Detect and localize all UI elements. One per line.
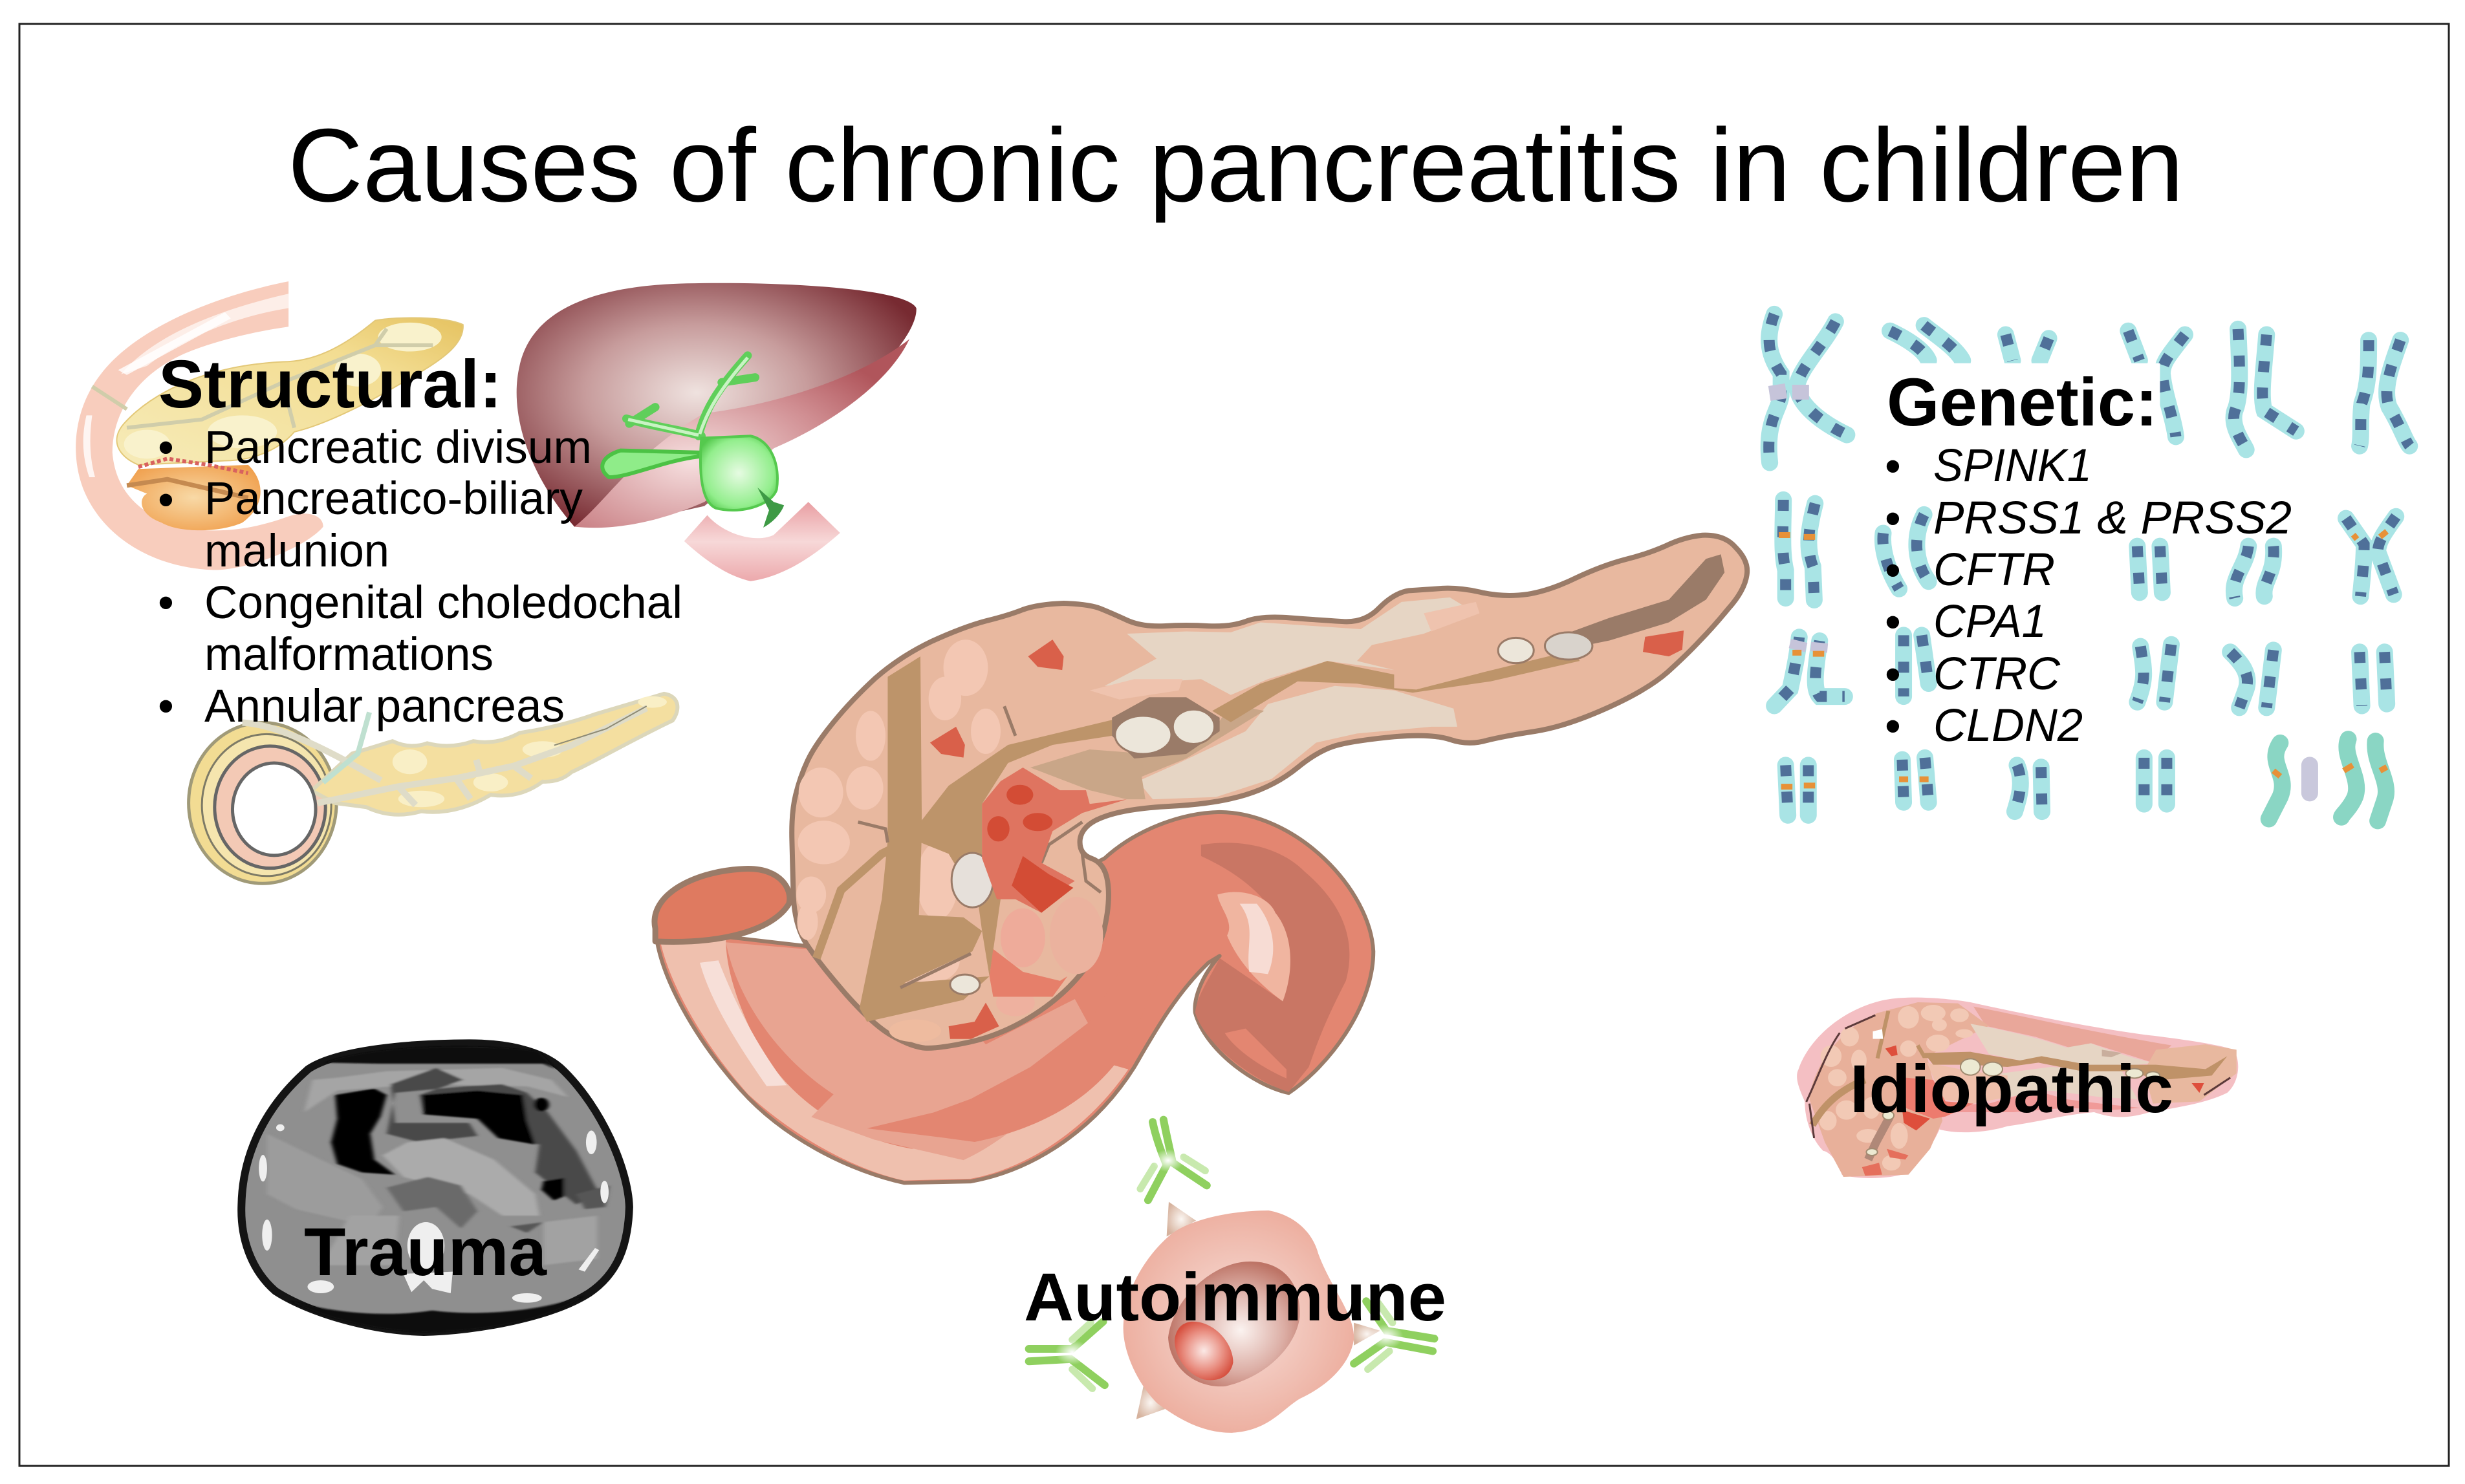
bullet list: PRSS1 & PRSS2 xyxy=(1933,493,2292,544)
antibody spikes xyxy=(1136,1202,1380,1419)
panel: genetic causes xyxy=(1769,314,2409,821)
antibody left xyxy=(1029,1322,1105,1388)
duodenum xyxy=(655,812,1373,1183)
bullet list: Congenital choledochal xyxy=(204,577,682,629)
arrow: bile flow xyxy=(757,488,784,528)
illustration: central pancreas and duodenum xyxy=(655,535,1747,1183)
duodenum opening xyxy=(655,869,790,941)
heading: Structural: xyxy=(158,347,502,422)
icon: pancreas divisum xyxy=(76,281,463,570)
label: Idiopathic xyxy=(1850,1051,2173,1127)
pancreas body xyxy=(792,535,1747,1048)
necrotic area xyxy=(982,768,1127,913)
icon: chromosome karyotype xyxy=(1769,314,2409,821)
icon: small pancreas xyxy=(1797,998,2238,1178)
bullet list: SPINK1 xyxy=(1933,440,2092,491)
stones xyxy=(950,632,1592,995)
label: Trauma xyxy=(304,1214,548,1290)
bullet list: • xyxy=(1885,597,1901,648)
heading: Genetic: xyxy=(1887,365,2158,440)
bullet list: • xyxy=(158,422,174,473)
bullet list: malunion xyxy=(204,526,389,577)
nucleus xyxy=(1168,1262,1299,1386)
bullet list: Pancreatic divisum xyxy=(204,422,592,473)
nucleolus xyxy=(1175,1322,1233,1380)
cell xyxy=(1124,1210,1354,1433)
bullet list: • xyxy=(1885,441,1901,492)
bullet list: • xyxy=(158,475,174,526)
antibody right xyxy=(1354,1301,1435,1370)
bullet list: • xyxy=(1885,493,1901,544)
red lesions xyxy=(930,630,1684,1039)
icon: cell with antibodies xyxy=(1029,1120,1435,1433)
panel: structural causes xyxy=(76,281,917,883)
bullet list: CFTR xyxy=(1933,544,2055,596)
bullet list xyxy=(1885,440,2292,752)
gallbladder xyxy=(700,436,777,510)
bullet list: Pancreatico-biliary xyxy=(204,473,583,524)
image: abdominal CT scan xyxy=(241,1043,629,1332)
side ducts xyxy=(816,833,922,958)
icon: liver and gallbladder xyxy=(517,283,917,581)
bullet list: CTRC xyxy=(1933,649,2061,700)
lobules xyxy=(796,640,1103,1042)
bullet list: CLDN2 xyxy=(1933,700,2083,751)
bullet list: • xyxy=(1885,649,1901,700)
bullet list: • xyxy=(1885,545,1901,596)
panel: autoimmune xyxy=(1024,1120,1446,1433)
label: Autoimmune xyxy=(1024,1260,1446,1335)
panel: trauma xyxy=(241,1043,629,1332)
title: Causes of chronic pancreatitis in children xyxy=(288,107,2184,224)
bullet list: • xyxy=(158,577,174,629)
panel: idiopathic xyxy=(1797,998,2238,1178)
bullet list: Annular pancreas xyxy=(204,681,565,732)
bullet list xyxy=(158,422,682,732)
bullet list: • xyxy=(158,681,174,732)
bullet list: malformations xyxy=(204,629,494,680)
icon: annular pancreas xyxy=(189,694,677,883)
main ducts xyxy=(860,656,990,1022)
bullet list: • xyxy=(1885,701,1901,752)
duodenal arc xyxy=(684,502,840,581)
gallbladder ducts xyxy=(626,356,755,436)
antibody top xyxy=(1140,1120,1207,1200)
bullet list: CPA1 xyxy=(1933,596,2047,647)
